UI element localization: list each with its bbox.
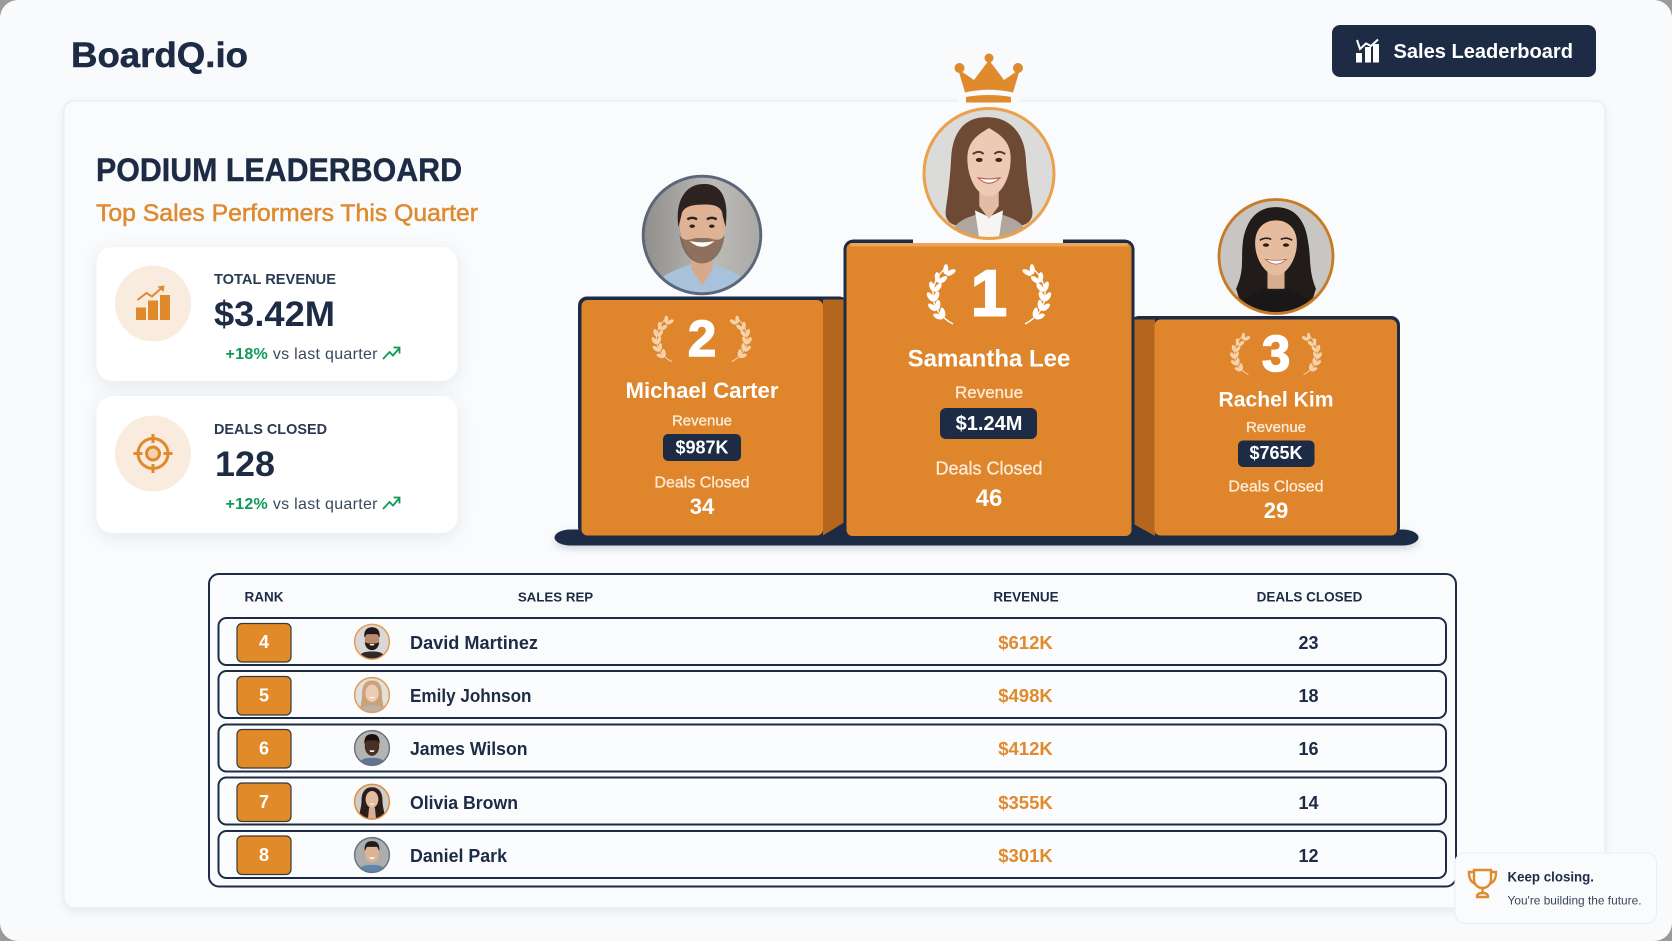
row: rank 4: 4: [259, 632, 269, 652]
name: Samantha Lee: [908, 346, 1070, 372]
row: rank 4: David Martinez: [410, 633, 538, 653]
rank number: 2: [688, 310, 716, 367]
revenue label: Revenue: [1246, 419, 1306, 436]
value: 128: [215, 445, 275, 484]
icon: target: [115, 416, 191, 492]
header: deals closed: DEALS CLOSED: [1257, 590, 1363, 604]
label: DEALS CLOSED: [214, 421, 327, 438]
deals value: 46: [976, 485, 1002, 512]
avatar: Michael Carter: [643, 176, 761, 294]
laurel left: [1229, 331, 1252, 375]
rank number: 3: [1262, 325, 1290, 382]
callout text: You're building the future.: [1508, 894, 1642, 908]
revenue pill: $1.24M: [956, 413, 1022, 435]
deals label: Deals Closed: [654, 474, 750, 492]
row: rank 8: [218, 831, 1446, 878]
panel: deals closed card: [96, 396, 458, 533]
revenue label: Revenue: [672, 412, 732, 430]
avatar: Rachel Kim: [1219, 200, 1333, 314]
main panel: [64, 101, 1605, 908]
row: rank 6: $412K: [998, 738, 1053, 759]
panel: podium third place: [1130, 316, 1400, 536]
row: rank 5: 18: [1298, 686, 1319, 706]
deals label: Deals Closed: [1228, 478, 1324, 496]
row: rank 5: Emily Johnson: [410, 686, 532, 706]
header: rank: RANK: [244, 590, 284, 604]
row: rank 6: [218, 724, 1446, 772]
revenue label: Revenue: [955, 383, 1023, 402]
callout heading: Keep closing.: [1508, 868, 1594, 884]
value: $3.42M: [214, 295, 335, 334]
revenue pill: $765K: [1249, 443, 1303, 463]
icon: crown: [954, 54, 1023, 104]
row: rank 4: $612K: [998, 632, 1053, 653]
deals value: 29: [1264, 498, 1288, 523]
revenue pill: [940, 408, 1037, 439]
row: rank 5: $498K: [998, 685, 1053, 706]
laurel left: [925, 262, 958, 324]
row: rank 8: 8: [259, 845, 269, 865]
row: rank 4: [218, 618, 1446, 665]
subtitle: Top Sales Performers This Quarter: [96, 200, 478, 227]
laurel right: [1020, 262, 1053, 324]
row: rank 6: 6: [259, 738, 269, 758]
laurel left: [650, 314, 676, 362]
row: rank 7: 7: [259, 792, 269, 812]
row: rank 5: 5: [259, 686, 269, 706]
revenue pill: $987K: [675, 438, 729, 458]
row: rank 7: [218, 778, 1446, 824]
heading: Podium Leaderboard: PODIUM LEADERBOARD: [96, 152, 462, 188]
panel: podium second place: [578, 296, 848, 536]
badge: Sales Leaderboard: [1332, 25, 1596, 77]
callout: keep closing: [1455, 853, 1656, 924]
name: Rachel Kim: [1218, 388, 1334, 412]
row: rank 6: 16: [1298, 739, 1319, 759]
row: rank 7: Olivia Brown: [410, 793, 518, 813]
badge label: Sales Leaderboard: [1394, 41, 1573, 63]
icon: trophy: [1469, 870, 1496, 897]
header: sales rep: SALES REP: [518, 590, 593, 604]
row: rank 8: 12: [1298, 846, 1319, 866]
rank number: 1: [971, 256, 1007, 330]
icon: rising bar chart: [115, 266, 191, 342]
laurel right: [728, 314, 753, 362]
logo: BoardQ.io: BoardQ.io: [71, 36, 248, 75]
icon: bar chart: [1356, 40, 1379, 62]
avatar: Samantha Lee: [922, 106, 1056, 241]
trend: +18% vs last quarter: [226, 346, 378, 363]
revenue pill: [663, 434, 741, 461]
deals value: 34: [690, 494, 715, 519]
header: revenue: REVENUE: [993, 590, 1059, 604]
row: rank 8: Daniel Park: [410, 846, 508, 866]
laurel right: [1300, 331, 1323, 375]
row: rank 5: [218, 671, 1446, 718]
row: rank 8: $301K: [998, 845, 1053, 866]
table: remaining sales reps: [209, 574, 1456, 886]
trend: +12% vs last quarter: [226, 496, 378, 513]
name: Michael Carter: [626, 378, 779, 403]
revenue pill: [1238, 440, 1314, 467]
panel: total revenue card: [96, 247, 458, 381]
row: rank 7: $355K: [998, 792, 1053, 813]
deals label: Deals Closed: [935, 458, 1043, 478]
label: TOTAL REVENUE: [214, 271, 336, 288]
row: rank 4: 23: [1298, 633, 1319, 653]
panel: podium first place: [844, 236, 1134, 536]
row: rank 7: 14: [1298, 793, 1319, 813]
row: rank 6: James Wilson: [410, 739, 528, 759]
podium base: [554, 530, 1418, 546]
